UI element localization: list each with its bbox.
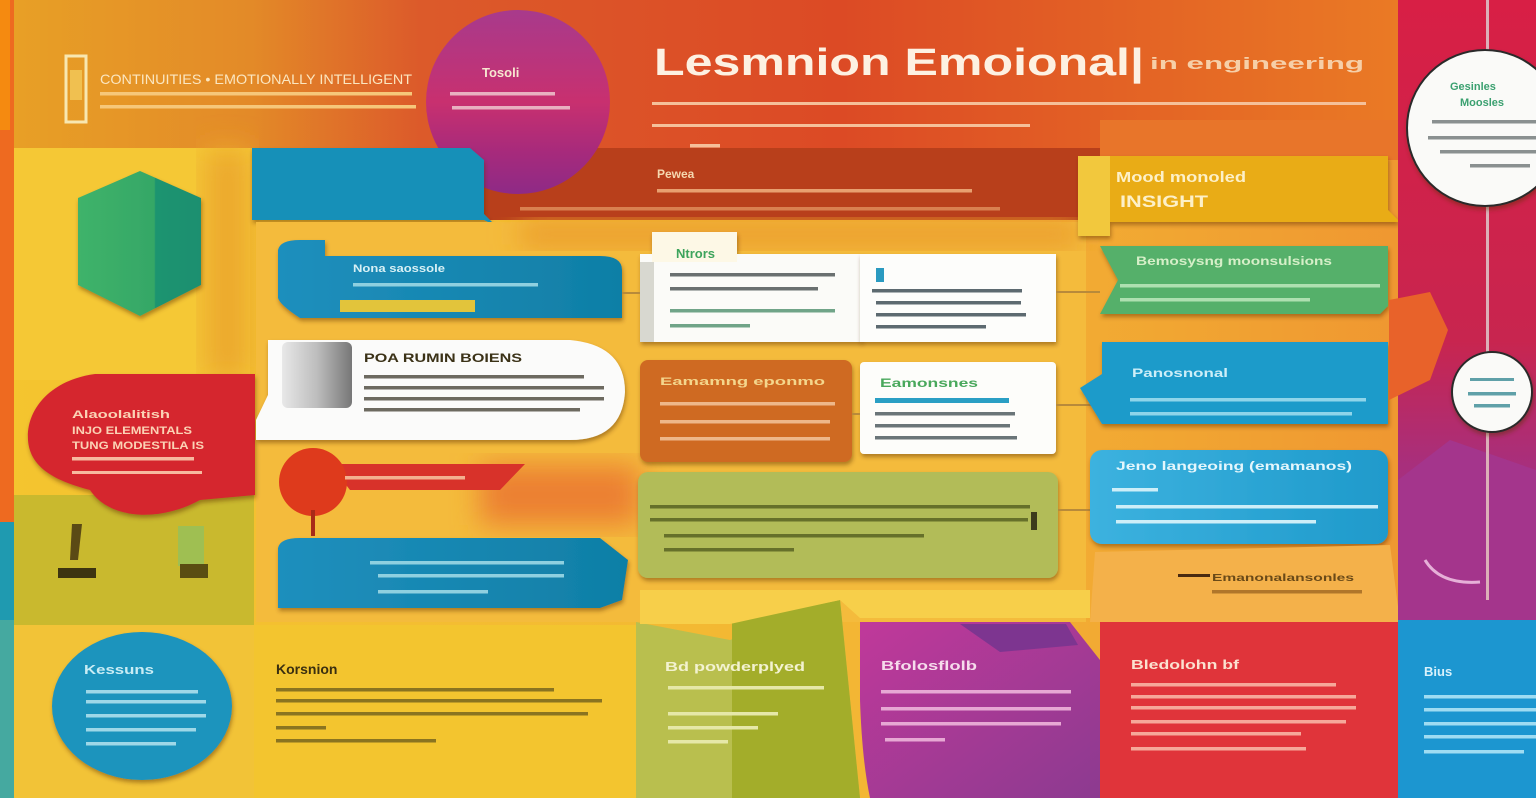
- orange card: Eamamng eponmo: [660, 376, 825, 388]
- right column: green card: [1100, 246, 1388, 314]
- header band: [0, 0, 1400, 220]
- top white callout circle: Gesinles: [1450, 81, 1496, 93]
- yellow ledge: [640, 590, 1090, 624]
- right column: sky card: [1090, 450, 1388, 544]
- top white callout circle: [1407, 50, 1536, 206]
- orange note: [1090, 545, 1400, 622]
- bottom panel: magenta: Bfolosflolb: [881, 658, 977, 673]
- red speech bubble: Alaoolalitish: [72, 409, 170, 421]
- right column: green card: Bemosysng moonsulsions: [1136, 254, 1332, 268]
- teal bar 1: Nona saossole: [353, 263, 445, 275]
- red speech bubble: INJO ELEMENTALS: [72, 425, 192, 437]
- bottom panel: yellow text: Korsnion: [276, 661, 337, 677]
- bottom panel: red: [1100, 622, 1398, 798]
- bottom panel: red: Bledolohn bf: [1131, 657, 1240, 672]
- connector lines: [622, 292, 1100, 510]
- right column: yellow card: [1078, 156, 1400, 236]
- white bar with cylinder: POA RUMIN BOIENS: [364, 351, 522, 365]
- teal bar 2: [278, 538, 628, 608]
- blue ribbon: [252, 148, 496, 226]
- orange note: Emanonalansonles: [1212, 573, 1355, 584]
- right column: blue card: [1080, 342, 1388, 424]
- blue circle: Kessuns: [84, 662, 154, 677]
- title: in engineering: [1150, 54, 1364, 73]
- bottom panel: olive: Bd powderplyed: [665, 659, 805, 674]
- top white callout circle: Moosles: [1460, 97, 1504, 109]
- teal bar 1: [278, 240, 622, 318]
- white card lower: [860, 362, 1056, 454]
- title: Lesmnion Emoional|: [654, 42, 1144, 84]
- header small label: [66, 56, 416, 122]
- bottom panel: right blue text: Bius: [1424, 664, 1452, 679]
- white card right: [860, 254, 1056, 342]
- white card left: [640, 232, 862, 342]
- header small label: CONTINUITIES • EMOTIONALLY INTELLIGENT: [100, 71, 412, 87]
- white card left: Ntrors: [676, 246, 715, 261]
- bottom panel: right blue text: [1424, 664, 1536, 754]
- purple circle badge: Tosoli: [482, 65, 519, 80]
- hexagon: [78, 171, 201, 316]
- right column: yellow card: INSIGHT: [1120, 192, 1209, 211]
- olive card: [638, 472, 1058, 578]
- left column blocks: [14, 148, 254, 798]
- right column: yellow card: Mood monoled: [1116, 169, 1246, 186]
- blue circle: [52, 632, 232, 780]
- left edge strip: [0, 0, 14, 798]
- red speech bubble: TUNG MODESTILA IS: [72, 440, 204, 452]
- right side column: [1398, 0, 1536, 798]
- right column: sky card: Jeno langeoing (emamanos): [1116, 459, 1352, 473]
- white card lower: Eamonsnes: [880, 376, 978, 390]
- intro text: [652, 102, 1366, 148]
- right column: blue card: Panosnonal: [1132, 366, 1228, 380]
- red speech bubble: [28, 374, 255, 515]
- purple circle badge: [426, 10, 610, 194]
- header dark band text: [520, 167, 1000, 210]
- title: [654, 42, 1364, 84]
- central sand panel: [256, 222, 1086, 622]
- bottom panel: magenta: [860, 622, 1100, 798]
- bottom panel: olive: [636, 600, 860, 798]
- orange hex accent: [1389, 292, 1448, 400]
- orange card: [640, 360, 852, 462]
- red pin: [279, 448, 525, 536]
- small icons: [58, 524, 208, 578]
- white bar with cylinder: [256, 340, 625, 440]
- header dark band text: Pewea: [657, 167, 695, 181]
- small white callout circle: [1452, 352, 1532, 432]
- bottom panel: yellow text: [254, 625, 638, 798]
